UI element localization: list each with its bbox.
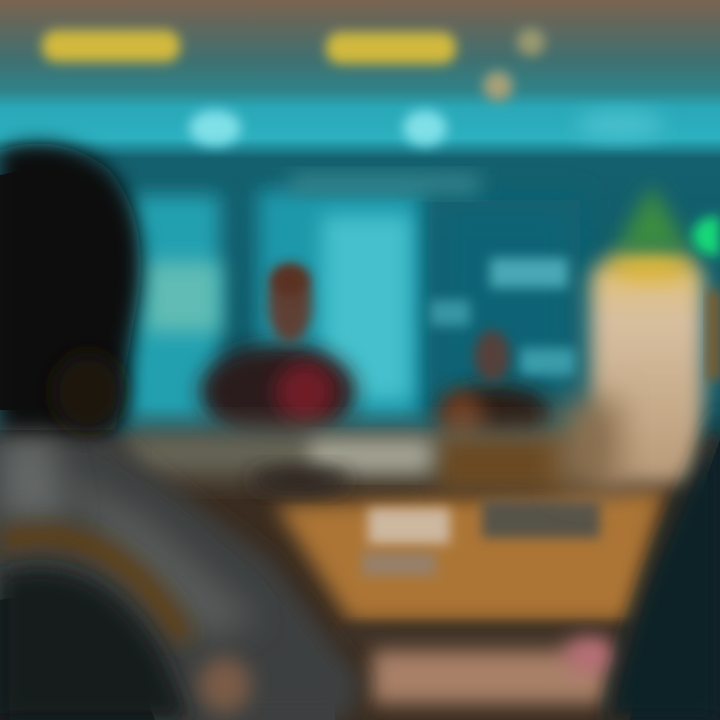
- papers on table: [250, 440, 600, 576]
- cyan light spots: [189, 110, 664, 146]
- table: [120, 430, 665, 704]
- foreground person right: [605, 400, 720, 720]
- ceiling lights: [42, 28, 545, 101]
- wall panels: [130, 174, 580, 420]
- foreground person left: [0, 143, 360, 720]
- presenter right: [440, 330, 553, 446]
- lamp column: [560, 185, 720, 490]
- presenter left: [200, 264, 356, 440]
- foreground chair: [0, 536, 251, 720]
